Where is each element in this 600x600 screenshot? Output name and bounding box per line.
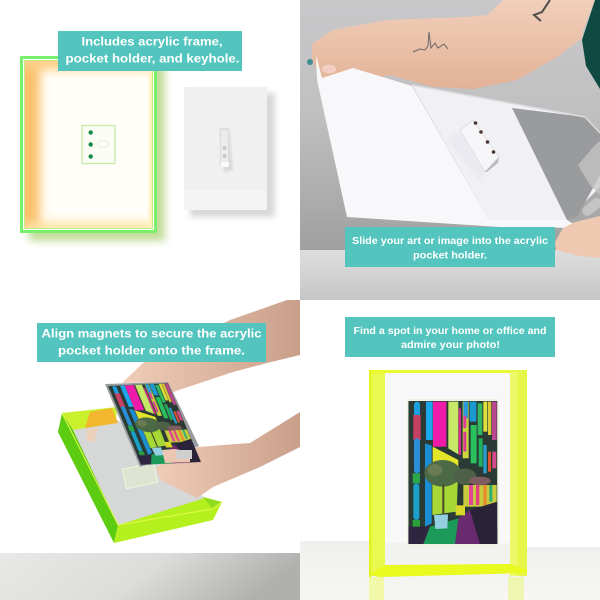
caption banner 1: pocket holder, and keyhole. <box>66 52 240 66</box>
panel: finished framed photo <box>300 300 600 600</box>
frame reflection on floor <box>369 577 524 600</box>
neon yellow block frame <box>369 370 527 577</box>
caption banner 3: pocket holder onto the frame. <box>58 344 245 358</box>
thumb and clip <box>162 449 192 463</box>
caption banner 2 <box>345 227 555 267</box>
neon frame with soft glow <box>16 50 165 241</box>
frame clip at right edge <box>578 141 600 195</box>
acrylic pocket <box>412 85 600 220</box>
caption banner 3 <box>37 323 266 362</box>
framed stained-glass photo <box>407 399 499 547</box>
white art sheet <box>316 55 580 228</box>
caption banner 4: Find a spot in your home or office and <box>354 325 546 337</box>
caption banner 3: Align magnets to secure the acrylic <box>42 326 262 340</box>
acrylic holder block with magnets <box>460 120 499 172</box>
clear pocket holder <box>184 87 275 217</box>
lower hand <box>555 216 600 258</box>
caption banner 2: pocket holder. <box>413 250 487 262</box>
arm and hand <box>307 0 595 89</box>
photo held in hand <box>105 382 201 467</box>
upper arm <box>122 300 300 392</box>
caption banner 2: Slide your art or image into the acrylic <box>352 235 548 247</box>
panel: aligning magnets onto frame <box>0 300 300 600</box>
lower arm and hand <box>156 412 300 498</box>
caption banner 1 <box>58 31 242 71</box>
sleeve <box>582 0 600 89</box>
panel: acrylic frame and pocket holder <box>20 31 278 246</box>
caption banner 4 <box>345 317 555 357</box>
panel: sliding art into pocket <box>300 0 600 300</box>
caption banner 1: Includes acrylic frame, <box>82 34 222 48</box>
keyhole plate with magnets <box>82 126 115 164</box>
neon tray frame <box>58 407 222 543</box>
caption banner 4: admire your photo! <box>401 339 500 351</box>
